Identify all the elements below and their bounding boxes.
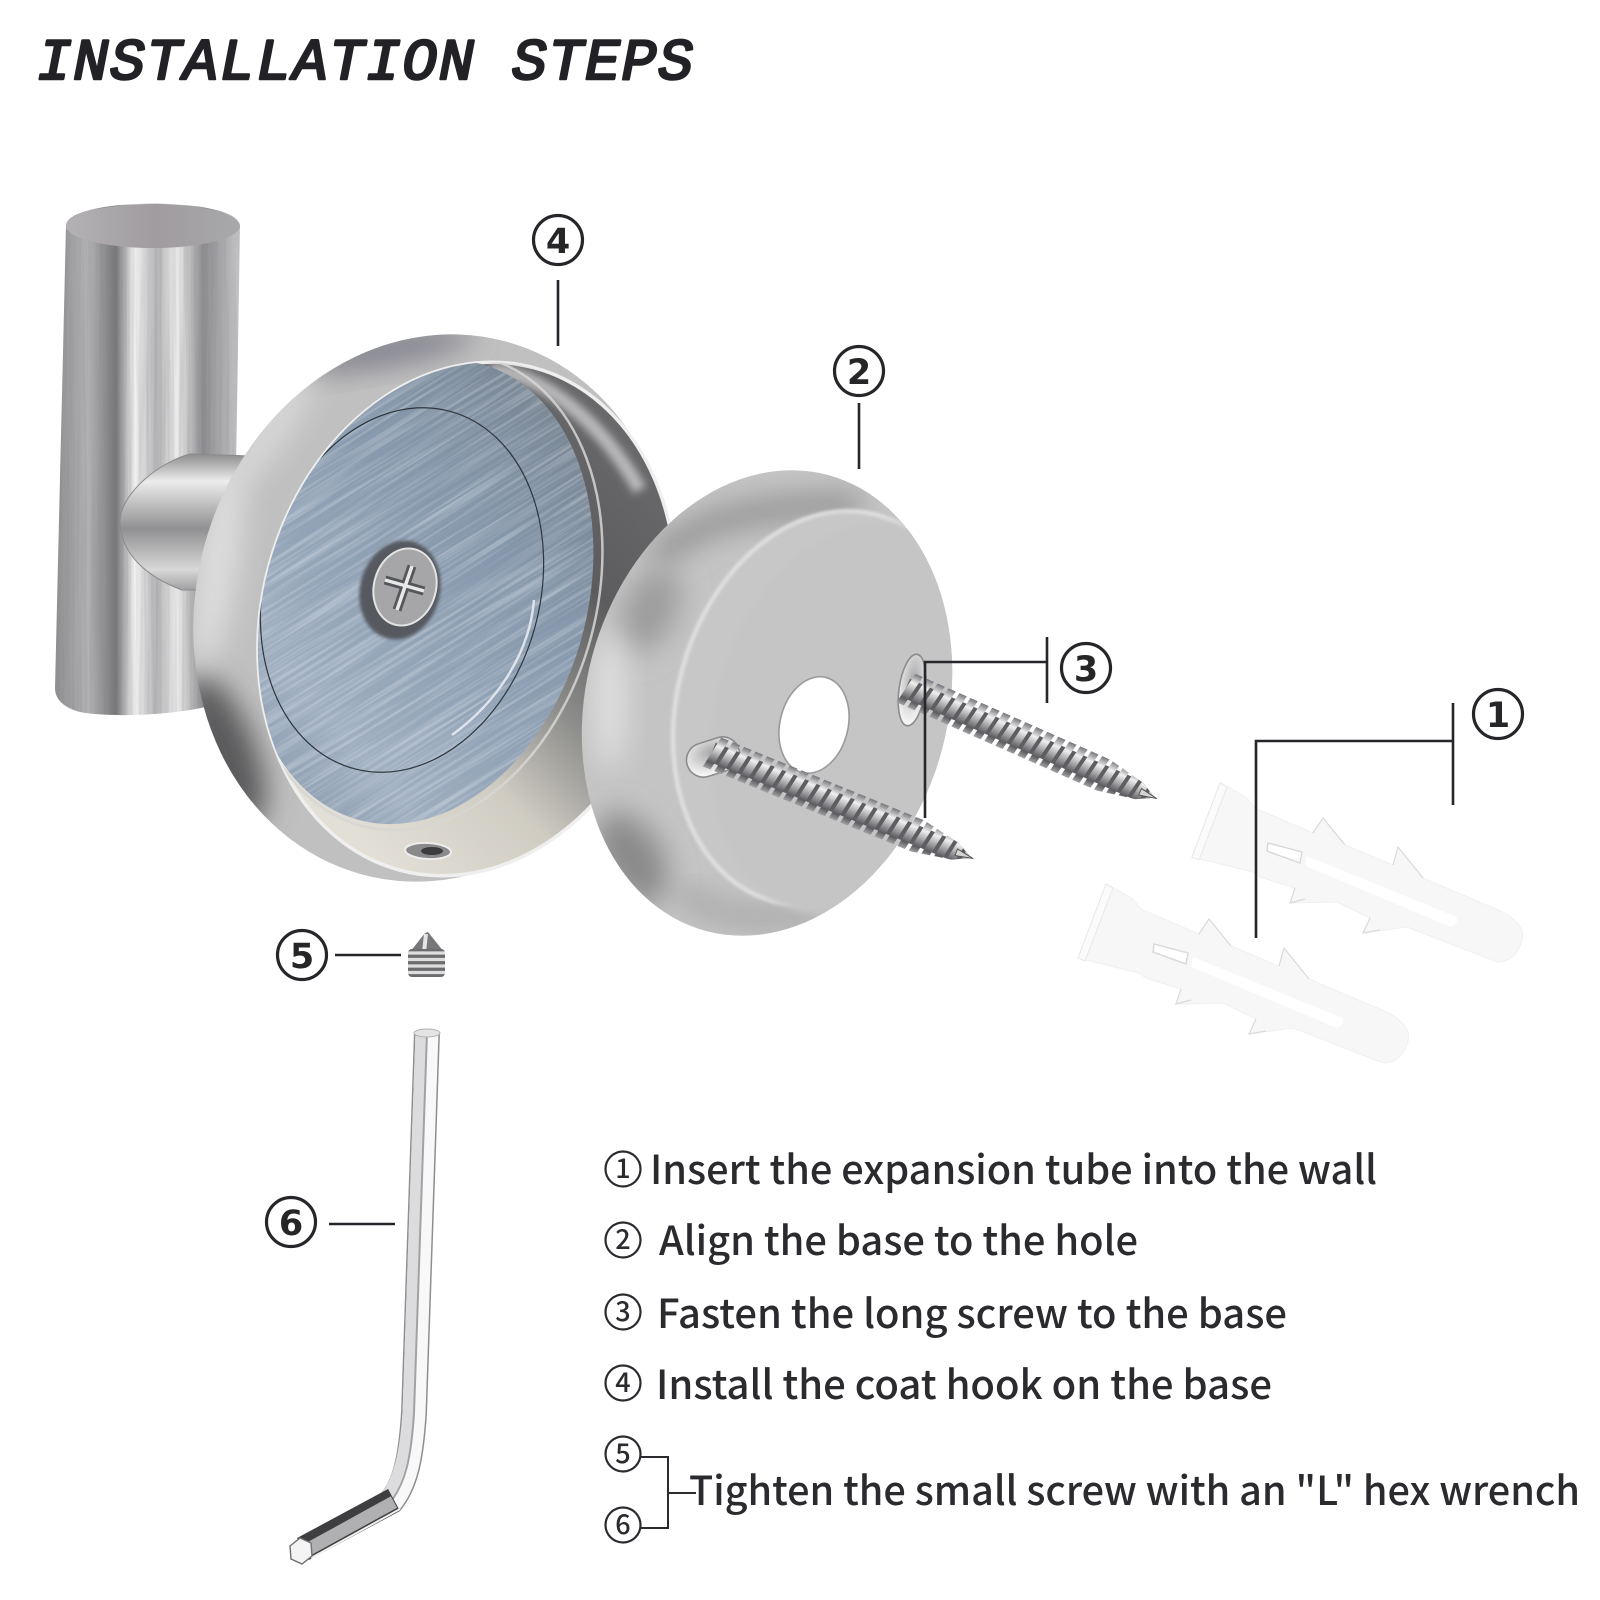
step 4: 4 <box>615 1361 631 1400</box>
base plate <box>582 470 952 936</box>
callout 6: 6 <box>279 1204 303 1244</box>
callout 3: 3 <box>1074 650 1098 690</box>
upper long screw <box>902 679 1161 808</box>
step 2: 2 <box>615 1218 631 1257</box>
step 5 and 6: Tighten the small screw with an "L" hex wrench <box>689 1459 1580 1517</box>
lower tube <box>1078 884 1409 1063</box>
step 1: Insert the expansion tube into the wall <box>650 1138 1377 1196</box>
step 5 and 6 <box>606 1432 1580 1542</box>
step 3: 3 <box>615 1290 631 1329</box>
cup centre screw <box>348 531 452 649</box>
step 4: Install the coat hook on the base <box>656 1353 1272 1411</box>
callout 5: 5 <box>290 937 314 977</box>
callout 1: 1 <box>1486 696 1510 736</box>
step 3: Fasten the long screw to the base <box>657 1282 1287 1340</box>
small set screw <box>408 932 445 977</box>
hook cup inner <box>256 360 670 878</box>
long screws <box>708 679 1161 868</box>
hook cylinder <box>50 204 245 720</box>
upper tube <box>1192 783 1523 962</box>
coat hook exploded part <box>55 204 670 882</box>
step 5 and 6: 5 <box>615 1432 631 1471</box>
centre hole <box>769 669 859 781</box>
callout 5 <box>278 930 401 980</box>
callout 6 <box>266 1198 395 1246</box>
cup small hole <box>405 842 451 860</box>
callout 2: 2 <box>847 353 871 393</box>
step 1: 1 <box>615 1147 631 1186</box>
callout 3 <box>925 637 1110 818</box>
L hex wrench <box>290 1029 440 1564</box>
hook neck <box>120 454 250 590</box>
step 5 and 6: 6 <box>615 1503 631 1542</box>
expansion tubes <box>1078 783 1523 1063</box>
callout 1 <box>1256 690 1522 938</box>
step 2: Align the base to the hole <box>659 1209 1138 1267</box>
slot holes <box>682 653 930 782</box>
callout 2 <box>834 346 884 469</box>
callout 4 <box>534 216 582 346</box>
lower long screw <box>708 743 977 868</box>
title: INSTALLATION STEPS <box>37 32 693 97</box>
callout 4: 4 <box>546 222 570 262</box>
hook cup outer shell <box>193 334 628 882</box>
